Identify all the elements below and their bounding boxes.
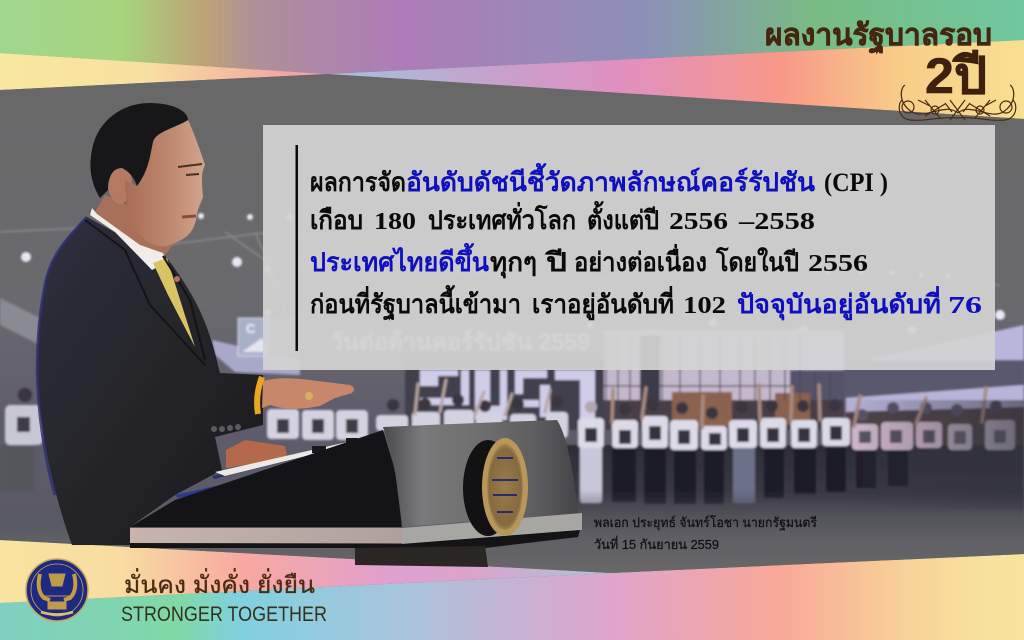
line 3: โดยในปี — [715, 246, 799, 277]
papers — [215, 438, 367, 476]
black wedge — [130, 430, 402, 527]
eye and brow — [178, 164, 202, 175]
line 1: อันดับดัชนีชี้วัดภาพลักษณ์คอร์รัปชัน — [406, 162, 815, 197]
government seal — [26, 559, 88, 621]
suit — [37, 217, 263, 545]
top left colour wedge — [0, 53, 327, 90]
mouth — [182, 216, 196, 217]
stage floor fade — [560, 490, 1024, 530]
raised hand — [262, 378, 354, 409]
crowd left — [0, 380, 568, 491]
lower base — [130, 530, 580, 548]
line 2: ประเทศทั่วโลก — [428, 201, 576, 235]
blue edge — [175, 463, 320, 498]
stage slogan text: วันต่อต้านคอร์รัปชัน 2559 — [330, 328, 590, 356]
line 3: ทุกๆ — [490, 248, 537, 279]
line 4: 102 — [683, 293, 726, 319]
lapel — [85, 220, 205, 365]
line 2: 2556 — [669, 209, 728, 235]
gate light wall — [604, 330, 844, 422]
crowd far left — [0, 405, 43, 491]
lavender stage band mid — [212, 340, 300, 375]
slogan english: STRONGER TOGETHER — [121, 603, 327, 626]
crowd right — [578, 385, 1015, 504]
right backdrop wall — [844, 360, 1024, 400]
line 2: –2558 — [738, 209, 815, 235]
line 2 — [310, 200, 815, 235]
line 2: ตั้งแต่ปี — [587, 200, 659, 235]
seal cylinder — [463, 440, 513, 536]
stage lights — [21, 213, 1005, 348]
line 4: เราอยู่อันดับที่ — [532, 285, 674, 321]
left strip — [130, 528, 402, 543]
ear — [108, 164, 132, 204]
title: ผลงานรัฐบาลรอบ — [765, 19, 992, 55]
bottom colour band — [0, 554, 1024, 640]
gate dark columns — [604, 335, 844, 430]
right backdrop band — [846, 385, 1024, 412]
line 4: ปัจจุบันอยู่อันดับที่ — [737, 285, 941, 321]
line 1 — [310, 162, 888, 197]
line 2: เกือบ — [310, 206, 363, 235]
dark backdrop behind letters — [405, 360, 605, 430]
line 3 — [310, 242, 868, 279]
translucent text panel — [263, 125, 995, 370]
lavender stage band right — [820, 325, 1024, 395]
line 4: ก่อนที่รัฐบาลนี้เข้ามา — [310, 284, 521, 322]
line 3: ปี — [545, 248, 567, 277]
line 4: 76 — [948, 293, 982, 319]
photo: stage background — [0, 74, 1024, 573]
large white backdrop letters — [420, 370, 595, 420]
top colour band — [0, 0, 1024, 74]
CPI logo box — [238, 318, 300, 356]
line 1: ผลการจัด — [310, 168, 406, 197]
tie — [153, 258, 195, 347]
hair — [90, 103, 188, 198]
caption name: พลเอก ประยุทธ์ จันทร์โอชา นายกรัฐมนตรี — [594, 515, 817, 531]
truss lines — [0, 228, 1000, 340]
top right colour wedge — [327, 40, 1024, 119]
panel accent bar — [296, 145, 298, 351]
panel body text — [310, 162, 982, 322]
right backdrop lower — [846, 407, 1024, 445]
stage floor — [400, 445, 1024, 520]
brown panels — [672, 392, 810, 426]
metal top — [383, 420, 578, 527]
lectern seal — [482, 438, 528, 536]
right strip — [402, 513, 582, 544]
shirt collar — [90, 208, 167, 270]
gate bars — [604, 335, 830, 425]
line 4 — [310, 284, 982, 322]
clips — [312, 438, 358, 453]
caption date: วันที่ 15 กันยายน 2559 — [594, 536, 719, 552]
sleeve buttons — [211, 424, 241, 432]
ornament — [899, 85, 1016, 120]
face — [125, 120, 205, 246]
photo caption — [594, 515, 817, 552]
pedestal — [355, 546, 488, 567]
lectern — [130, 420, 582, 567]
lower hand — [226, 440, 287, 468]
line 2: 180 — [374, 209, 416, 235]
slogan thai: มั่นคง มั่งคั่ง ยั่งยืน — [124, 568, 315, 599]
bottom left colour wedge — [0, 540, 611, 603]
blue folder — [212, 437, 368, 479]
neck — [95, 195, 185, 262]
line 3: อย่างต่อเนื่อง — [574, 243, 707, 277]
yellow wristband — [257, 377, 262, 414]
ring — [305, 392, 313, 400]
title year: 2ปี — [925, 48, 987, 104]
line 3: 2556 — [808, 251, 868, 277]
prime minister figure — [37, 103, 354, 545]
line 3: ประเทศไทยดีขึ้น — [310, 242, 489, 277]
suit rim light — [37, 217, 87, 495]
lapel pin — [174, 276, 180, 282]
photo: stage scene — [0, 213, 1024, 530]
lavender stage band left — [0, 298, 40, 345]
crowd right dim — [840, 400, 1024, 510]
line 1: (CPI ) — [824, 168, 888, 197]
CPI logo box: C — [246, 321, 256, 336]
